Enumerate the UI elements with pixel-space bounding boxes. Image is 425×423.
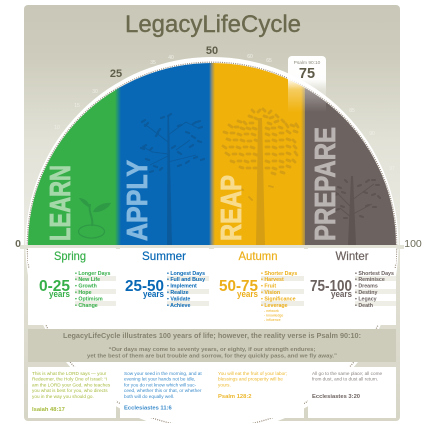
panel: summer details: years	[143, 289, 164, 299]
age scale labels: 35	[150, 60, 156, 66]
verse: ecclesiastes 11:6: Sow your seed in the morning, and at	[124, 371, 202, 376]
label: PREPARE: PREPARE	[310, 127, 342, 241]
age scale labels: 30	[92, 89, 98, 95]
age scale labels: 25	[110, 68, 122, 80]
panel: summer details: • Full and Busy	[167, 277, 205, 283]
panel: autumn details: 50-75	[219, 278, 258, 295]
verse: ecclesiastes 11:6: Ecclesiastes 11:6	[124, 406, 172, 412]
band: reap	[209, 60, 308, 246]
panel: winter details: • Reminisce	[355, 277, 385, 283]
panel: winter details: • Death	[355, 303, 373, 309]
season: summer	[120, 248, 209, 264]
panel: spring details: • Hope	[75, 290, 92, 296]
panel: summer details: 25-50	[125, 278, 164, 295]
verse: ecclesiastes 3:20: Ecclesiastes 3:20	[312, 394, 360, 400]
verse: psalm 128:2: blessings and prosperity will be	[218, 377, 283, 382]
panel: summer details: • Realize	[167, 290, 189, 296]
panel: autumn details: - influence	[264, 318, 281, 322]
verse: psalm 128:2: You will eat the fruit of your labor;	[218, 371, 287, 376]
panel: autumn details: • Fruit	[261, 284, 276, 290]
panel: autumn details: • Harvest	[261, 277, 284, 283]
age scale labels: 50	[206, 45, 218, 57]
panel: spring details: • Optimism	[75, 296, 103, 302]
verse: isaiah	[28, 367, 116, 418]
verse: isaiah: you what is best for you, who directs	[32, 388, 108, 393]
panel: autumn details: years	[237, 289, 258, 299]
panel: spring details: 0-25	[39, 278, 70, 295]
icon: sprout	[78, 198, 111, 238]
icon: autumn tree	[223, 109, 298, 245]
panel: summer details: • Achieve	[167, 303, 190, 309]
band: prepare	[305, 88, 396, 245]
icon: blue tree	[141, 114, 204, 245]
season: autumn: Autumn	[238, 249, 278, 263]
psalm 90:10 callout: Psalm 90:10	[294, 60, 321, 66]
panel: autumn details: - knowledge	[264, 314, 283, 318]
verse: isaiah: am the LORD your God, who teaches	[32, 382, 111, 388]
verse: psalm 128:2: yours.	[218, 382, 231, 388]
panel: spring details: • Growth	[75, 284, 97, 290]
panel: summer details: • Validate	[167, 296, 190, 302]
psalm 90:10 callout: 75	[299, 66, 315, 82]
arch ring	[20, 57, 404, 423]
verse: isaiah: you in the way you should go.	[32, 394, 94, 399]
panel: autumn details: • Vision	[261, 290, 280, 296]
panel: winter details: • Destiny	[355, 290, 378, 296]
panel: spring details: years	[49, 289, 70, 299]
age scale labels: 10	[54, 125, 60, 131]
age scale labels	[15, 45, 422, 250]
age scale labels: 40	[168, 55, 174, 61]
panel: winter details: years	[331, 289, 352, 299]
verse: psalm 128:2: Psalm 128:2	[218, 394, 252, 400]
age scale labels: 65	[266, 58, 272, 64]
panel: autumn details: • Shorter Days	[261, 271, 297, 277]
season: summer: Summer	[142, 249, 186, 263]
panel: spring details: • New Life	[75, 277, 100, 283]
verse: isaiah: This is what the LORD says — your	[32, 371, 107, 376]
age scale labels: 90	[369, 131, 375, 137]
verse: ecclesiastes 11:6: ceed, whether this or that, or whether	[124, 388, 202, 393]
verse: ecclesiastes 11:6: evening let your hands not be idle,	[124, 377, 195, 382]
verse: ecclesiastes 11:6: for you do not know which will suc-	[124, 382, 197, 388]
age scale labels: 15	[74, 103, 80, 109]
verse: isaiah: Redeemer, the Holy One of Israel: “I	[32, 377, 107, 382]
verse: ecclesiastes 11:6	[120, 367, 209, 418]
panel: spring details: • Longer Days	[75, 271, 110, 277]
verse: psalm 128:2	[214, 367, 304, 418]
psalm summary band	[28, 329, 396, 362]
season: spring: Spring	[54, 249, 86, 263]
psalm summary band: “Our days may come to seventy years, or eighty, if our strength endures;	[108, 347, 316, 353]
age scale labels: 0	[15, 238, 21, 250]
panel: autumn details: • Significance	[261, 296, 296, 302]
season: autumn	[214, 248, 304, 264]
panel: winter details: • Shortest Days	[355, 271, 394, 277]
icon: bare tree	[335, 176, 380, 245]
age scale labels: 100	[404, 238, 422, 250]
label: LEARN: LEARN	[45, 165, 77, 241]
band: learn	[28, 90, 116, 245]
psalm 90:10 callout	[288, 56, 326, 112]
verse: ecclesiastes 3:20	[308, 367, 396, 418]
panel: winter details: • Dreams	[355, 284, 378, 290]
age scale labels: 60	[247, 54, 253, 60]
panel: summer details: • Implement	[167, 284, 197, 290]
panel: autumn details: - network	[264, 309, 279, 313]
season: winter	[308, 248, 396, 264]
season: winter: Winter	[336, 249, 369, 263]
label: APPLY: APPLY	[122, 160, 154, 241]
panel: summer details	[120, 268, 209, 325]
panel: winter details: • Legacy	[355, 296, 377, 302]
panel: spring details: • Change	[75, 303, 98, 309]
verse: ecclesiastes 3:20: All go to the same place; all come	[312, 371, 382, 376]
label: REAP: REAP	[216, 175, 248, 241]
title: LegacyLifeCycle	[125, 11, 301, 38]
psalm summary band: LegacyLifeCycle illustrates 100 years of life; however, the reality verse is Psalm 90:10:	[63, 331, 361, 340]
verse: isaiah: Isaiah 48:17	[32, 407, 65, 413]
panel: autumn details: • Leverage	[261, 303, 288, 309]
season: spring	[28, 248, 116, 264]
panel: winter details: 75-100	[310, 278, 352, 295]
panel: winter details	[308, 268, 396, 325]
age scale labels: 85	[349, 108, 355, 114]
panel: spring details	[28, 268, 116, 325]
age scale labels: 97	[389, 166, 395, 172]
life stage arch	[28, 60, 400, 246]
verse: ecclesiastes 3:20: from dust, and to dust all return.	[312, 377, 378, 382]
verse: ecclesiastes 11:6: both will do equally well.	[124, 394, 174, 399]
panel: autumn details	[214, 268, 304, 325]
psalm summary band: yet the best of them are but trouble and sorrow, for they quickly pass, and we fly away.”	[87, 354, 337, 360]
panel: summer details: • Longest Days	[167, 271, 205, 277]
band: apply	[115, 60, 210, 246]
